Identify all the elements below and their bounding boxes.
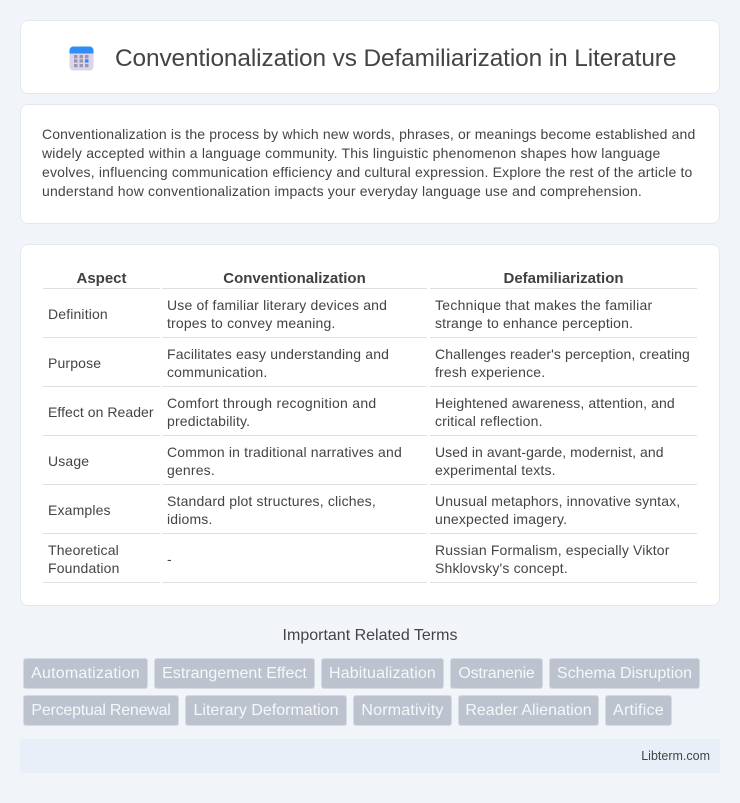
- intro text: widely accepted within a language community. This linguistic phenomenon shapes how language: [42, 145, 660, 161]
- tag: Literary Deformation: Literary Deformation: [194, 702, 338, 719]
- tag: Artifice: Artifice: [613, 702, 664, 719]
- tag: Estrangement Effect: [154, 658, 315, 689]
- related term tags: [23, 658, 700, 726]
- intro text: [42, 126, 695, 199]
- row: definition: [48, 297, 652, 331]
- tag: Ostranenie: Ostranenie: [458, 665, 535, 682]
- row: definition: Definition: [48, 306, 108, 322]
- row: usage: Used in avant-garde, modernist, and: [435, 444, 664, 460]
- related terms heading: Important Related Terms: [283, 627, 457, 644]
- tag: Normativity: [353, 695, 452, 726]
- row: effect on reader: [48, 395, 675, 429]
- row: theoretical foundation: Foundation: [48, 560, 120, 576]
- tag: Literary Deformation: [185, 695, 347, 726]
- table header: Aspect: [76, 270, 127, 287]
- icon: calendar: [70, 46, 94, 70]
- row: usage: [48, 444, 664, 478]
- title: Conventionalization vs Defamiliarization in Literature: [115, 45, 676, 72]
- tag: Artifice: [605, 695, 672, 726]
- row: definition: tropes to convey meaning.: [167, 315, 335, 331]
- row: effect on reader: critical reflection.: [435, 413, 543, 429]
- row: purpose: Purpose: [48, 355, 101, 371]
- row: theoretical foundation: -: [167, 551, 172, 567]
- row: definition: strange to enhance perception.: [435, 315, 633, 331]
- row: purpose: fresh experience.: [435, 364, 545, 380]
- footer bar: [20, 739, 720, 773]
- row: usage: Usage: [48, 453, 89, 469]
- row: effect on reader: Effect on Reader: [48, 404, 154, 420]
- row: examples: Unusual metaphors, innovative syntax,: [435, 493, 680, 509]
- tag: Estrangement Effect: Estrangement Effect: [162, 665, 307, 682]
- row: effect on reader: Heightened awareness, attention, and: [435, 395, 675, 411]
- tag: Ostranenie: [450, 658, 543, 689]
- row: theoretical foundation: Theoretical: [48, 542, 119, 558]
- table header: Defamiliarization: [503, 270, 624, 287]
- intro card: [20, 104, 720, 224]
- tag: Habitualization: [321, 658, 444, 689]
- row: purpose: [48, 346, 690, 380]
- row: usage: genres.: [167, 462, 215, 478]
- row: effect on reader: Comfort through recognition and: [167, 395, 376, 411]
- tag: Habitualization: Habitualization: [329, 665, 436, 682]
- table card: [20, 244, 720, 606]
- table header: [76, 270, 624, 287]
- row: examples: unexpected imagery.: [435, 511, 567, 527]
- tag: Reader Alienation: Reader Alienation: [465, 702, 592, 719]
- tag: Normativity: Normativity: [361, 702, 444, 719]
- tag: Automatization: [23, 658, 148, 689]
- row: usage: experimental texts.: [435, 462, 556, 478]
- row: theoretical foundation: [48, 542, 670, 576]
- row: theoretical foundation: Shklovsky's concept.: [435, 560, 568, 576]
- intro text: understand how conventionalization impacts your everyday language use and comprehension.: [42, 183, 642, 199]
- tag: Schema Disruption: Schema Disruption: [557, 665, 692, 682]
- tag: Automatization: Automatization: [31, 665, 140, 682]
- row: examples: Examples: [48, 502, 111, 518]
- row: purpose: communication.: [167, 364, 267, 380]
- row: theoretical foundation: Russian Formalism, especially Viktor: [435, 542, 670, 558]
- row: effect on reader: predictability.: [167, 413, 250, 429]
- row: definition: Technique that makes the familiar: [435, 297, 652, 313]
- row: examples: [48, 493, 680, 527]
- intro text: evolves, influencing communication efficiency and cultural expression. Explore the rest of the article to: [42, 164, 693, 180]
- table header: Conventionalization: [223, 270, 366, 287]
- intro text: Conventionalization is the process by which new words, phrases, or meanings become established and: [42, 126, 695, 142]
- tag: Perceptual Renewal: Perceptual Renewal: [31, 702, 171, 719]
- comparison table: [43, 270, 697, 583]
- tag: Reader Alienation: [458, 695, 599, 726]
- row: examples: idioms.: [167, 511, 213, 527]
- tag: Schema Disruption: [549, 658, 700, 689]
- row: usage: Common in traditional narratives and: [167, 444, 402, 460]
- row: purpose: Challenges reader's perception, creating: [435, 346, 690, 362]
- row: definition: Use of familiar literary devices and: [167, 297, 387, 313]
- header card: [20, 20, 720, 94]
- row: examples: Standard plot structures, cliches,: [167, 493, 376, 509]
- row: purpose: Facilitates easy understanding and: [167, 346, 389, 362]
- footer credit: Libterm.com: [641, 749, 710, 763]
- tag: Perceptual Renewal: [23, 695, 179, 726]
